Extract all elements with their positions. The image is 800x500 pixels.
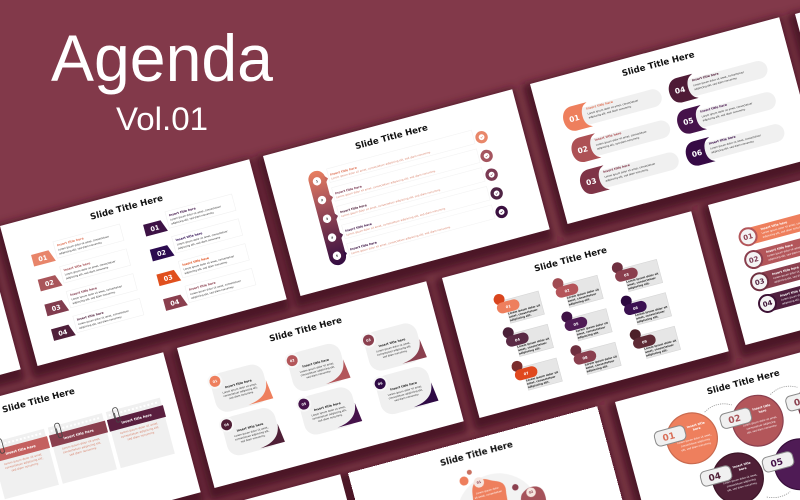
bar 03: Insert title here bbox=[772, 265, 799, 276]
decorative dots bbox=[457, 459, 519, 500]
pill 02: Insert title here bbox=[594, 131, 622, 142]
sheet 2: Insert title here bbox=[63, 428, 95, 440]
card 02: Insert title here bbox=[302, 358, 329, 369]
box 07: 07 bbox=[523, 371, 530, 376]
slide heading: Slide Title Here bbox=[1, 387, 76, 416]
item: left 03: 03 bbox=[51, 303, 62, 313]
box 08: 08 bbox=[582, 355, 588, 361]
sheet 2: sed diam nonummy. bbox=[69, 446, 97, 457]
ladder bar with numbered circles: 5 bbox=[335, 254, 338, 258]
card 05: Lorem ipsum dolor sit amet, bbox=[311, 404, 346, 417]
card 02: consectetuer adipiscing elit, bbox=[300, 364, 335, 377]
sheet 3 bbox=[104, 395, 176, 468]
item: left 03: adipiscing elit, sed diam nonummy. bbox=[72, 290, 116, 305]
card 06: Lorem ipsum dolor sit amet, bbox=[387, 384, 422, 397]
pill 05: adipiscing elit, sed diam nonummy. bbox=[702, 107, 746, 122]
box 04: 04 bbox=[515, 337, 521, 343]
bar 04 bbox=[756, 245, 800, 315]
slide heading: Slide Title Here bbox=[621, 50, 696, 79]
box 01: Lorem ipsum dolor sit bbox=[508, 303, 541, 316]
bar 01: Insert title here bbox=[760, 220, 788, 231]
sheet 2: consectetuer adipiscing elit, bbox=[63, 440, 102, 455]
box 02: amet, consectetuer bbox=[567, 291, 597, 303]
pill 02 bbox=[569, 114, 673, 164]
slide heading: Slide Title Here bbox=[89, 194, 164, 223]
card 06: consectetuer adipiscing elit, bbox=[388, 387, 423, 400]
slide heading: Slide Title Here bbox=[268, 316, 343, 345]
box 04 bbox=[501, 317, 554, 359]
circle 02: 02 bbox=[727, 414, 742, 427]
blob 02 bbox=[518, 484, 549, 500]
box 01: amet, consectetuer bbox=[508, 307, 539, 319]
list row 3: Lorem ipsum dolor sit amet, consectetuer adipiscing elit, sed diam nonummy. bbox=[341, 187, 441, 218]
circle 01: elit, sed diam nonummy. bbox=[681, 441, 712, 452]
card 03: Lorem ipsum dolor sit amet, bbox=[376, 340, 411, 354]
box 05: 05 bbox=[573, 322, 579, 327]
dotted connector 04 to 05 bbox=[767, 491, 791, 500]
box 05: adipiscing elit. bbox=[577, 330, 600, 340]
pill 03: Lorem ipsum dolor sit amet, consectetuer bbox=[604, 161, 657, 179]
bar 02: 02 bbox=[748, 255, 760, 265]
item: right 04: adipiscing elit, sed diam nonummy. bbox=[191, 285, 235, 300]
circle 05: 05 bbox=[770, 457, 784, 470]
box 02: 02 bbox=[564, 288, 571, 294]
box 09: 09 bbox=[642, 339, 648, 345]
item: right 04: 04 bbox=[169, 298, 181, 308]
box 01: adipiscing elit. bbox=[509, 313, 532, 322]
sheet 2: Lorem ipsum dolor sit amet, bbox=[62, 437, 101, 451]
item: left 04: adipiscing elit, sed diam nonummy. bbox=[79, 315, 123, 330]
circle 04: Insert title bbox=[732, 461, 751, 469]
circle 04 bbox=[696, 447, 770, 500]
card 05 bbox=[295, 383, 363, 438]
list row 1: Insert title here bbox=[330, 166, 357, 177]
card 03: consectetuer adipiscing elit, bbox=[376, 344, 412, 357]
list row 4: Lorem ipsum dolor sit amet, consectetuer adipiscing elit, sed diam nonummy. bbox=[346, 206, 446, 237]
item: right 01: 01 bbox=[150, 223, 161, 234]
item: left 02: 02 bbox=[44, 278, 55, 288]
item: left 04: Lorem ipsum dolor sit amet, consectetuer bbox=[78, 308, 130, 326]
card 01: consectetuer adipiscing elit, bbox=[223, 385, 258, 398]
pill 01: adipiscing elit, sed diam nonummy. bbox=[588, 104, 632, 120]
box 06 bbox=[620, 285, 672, 328]
ladder bar with numbered circles: 3 bbox=[326, 217, 329, 221]
box 02: adipiscing elit. bbox=[568, 297, 591, 307]
sheet 3: consectetuer adipiscing elit, bbox=[120, 425, 160, 439]
sheet 3: Lorem ipsum dolor sit amet, bbox=[119, 421, 159, 435]
panel: partial slide bottom left bbox=[91, 474, 378, 500]
pill 03: adipiscing elit, sed diam nonummy. bbox=[605, 167, 649, 183]
circle 01: here bbox=[692, 426, 701, 432]
sheet 3: Insert title here bbox=[121, 413, 153, 425]
item: right 01: Lorem ipsum dolor sit amet, consectetuer bbox=[170, 204, 222, 222]
card 05: Insert title here bbox=[313, 401, 341, 412]
circle 02: here bbox=[758, 408, 767, 414]
item: right 01: Insert title here bbox=[168, 206, 196, 217]
card 06: 06 bbox=[377, 381, 384, 386]
item: right 02: Lorem ipsum dolor sit amet, consectetuer bbox=[176, 229, 229, 246]
card 06: Insert title here bbox=[390, 381, 417, 392]
item: right 02: adipiscing elit, sed diam nonummy. bbox=[177, 235, 221, 250]
pill 04: Lorem ipsum dolor sit amet, consectetuer bbox=[693, 70, 745, 87]
ladder bar with numbered circles: 2 bbox=[321, 198, 324, 202]
bar 03: 03 bbox=[754, 277, 766, 287]
box 05: amet, consectetuer bbox=[576, 325, 606, 336]
bar 01 bbox=[736, 178, 800, 248]
circle 04: here bbox=[738, 466, 747, 472]
bar 02 bbox=[742, 201, 800, 271]
box 08: amet, consectetuer bbox=[585, 358, 615, 370]
slide heading: Slide Title Here bbox=[439, 440, 514, 469]
panel: slide with numbered circles bbox=[615, 335, 800, 500]
circle 05 bbox=[758, 432, 800, 499]
circle 04: 04 bbox=[708, 471, 722, 484]
item: right 04 bbox=[161, 268, 256, 311]
box 06: Lorem ipsum dolor sit bbox=[635, 305, 668, 317]
circle 01 bbox=[651, 406, 724, 473]
dotted connector 02 to 03 bbox=[769, 383, 797, 395]
item: left 02: Insert title here bbox=[63, 261, 91, 272]
pill 06: adipiscing elit, sed diam nonummy. bbox=[711, 139, 755, 154]
pill 05 bbox=[674, 86, 778, 136]
box 02: Lorem ipsum dolor sit bbox=[566, 287, 600, 300]
box 03: 03 bbox=[624, 272, 630, 278]
card 02: sed diam nonummy. bbox=[306, 369, 332, 379]
card 02 bbox=[283, 340, 351, 394]
box 07: adipiscing elit. bbox=[527, 380, 550, 389]
item: left 03: Insert title here bbox=[70, 286, 97, 297]
card 04: 04 bbox=[224, 422, 230, 428]
box 09 bbox=[629, 319, 681, 361]
pill 04: Insert title here bbox=[691, 72, 719, 83]
box 05 bbox=[560, 301, 612, 344]
dotted connector 01 to 02 bbox=[704, 401, 732, 412]
item: right 01: adipiscing elit, sed diam nonummy. bbox=[171, 210, 215, 226]
blob 02: 02 bbox=[528, 490, 534, 495]
bar 02: Insert title here bbox=[766, 243, 793, 254]
item: right 03: Insert title here bbox=[182, 256, 209, 267]
circle 04: Lorem ipsum dolor sit amet, bbox=[723, 472, 758, 485]
item: left 02: Lorem ipsum dolor sit amet, consectetuer bbox=[64, 259, 117, 277]
sheet 2 bbox=[46, 411, 118, 484]
bar 03 bbox=[748, 223, 800, 293]
box 08: adipiscing elit. bbox=[586, 364, 609, 373]
panel: partial slide top right bbox=[795, 0, 800, 154]
pill 04: 04 bbox=[674, 85, 686, 96]
item: left 01: Insert title here bbox=[56, 236, 84, 247]
box 04: adipiscing elit. bbox=[518, 346, 541, 356]
panel: slide with blobs bbox=[348, 406, 635, 500]
bar 04: 04 bbox=[762, 299, 773, 309]
panel: slide with six rounded cards bbox=[177, 281, 464, 488]
slide heading: Slide Title Here bbox=[706, 368, 781, 397]
pill 01: Insert title here bbox=[586, 100, 613, 111]
box 07 bbox=[510, 351, 562, 393]
blob 01: 01 bbox=[476, 480, 482, 485]
item: left 04 bbox=[49, 298, 144, 341]
sheet 1: sed diam nonummy. bbox=[11, 461, 39, 472]
blob 01: Lorem ipsum dolor bbox=[475, 485, 500, 496]
sheet 1: Insert title here bbox=[5, 444, 37, 456]
panel: partial slide far left bbox=[0, 229, 21, 436]
pill 02: Lorem ipsum dolor sit amet, consectetuer bbox=[595, 129, 648, 147]
circle 01: Insert title bbox=[686, 421, 705, 429]
circle 02: Lorem ipsum dolor sit amet, bbox=[742, 415, 778, 428]
list row 5: Lorem ipsum dolor sit amet, consectetuer adipiscing elit, sed diam nonummy. bbox=[351, 225, 451, 255]
pill 01: Lorem ipsum dolor sit amet, consectetuer bbox=[587, 98, 640, 116]
item: right 02: Insert title here bbox=[175, 231, 203, 242]
circle 04: elit, sed diam nonummy. bbox=[727, 481, 758, 492]
card 04: Insert title here bbox=[236, 422, 264, 433]
subtitle: Vol.01: Vol.01 bbox=[116, 101, 208, 137]
pill 04 bbox=[666, 55, 770, 105]
card 05: sed diam nonummy. bbox=[318, 412, 343, 423]
box 09: amet, consectetuer bbox=[645, 343, 675, 354]
card 03: Insert title here bbox=[378, 337, 406, 348]
card 01 bbox=[206, 361, 274, 415]
box 08: Lorem ipsum dolor sit bbox=[584, 354, 618, 367]
pill 03 bbox=[577, 146, 681, 196]
panel: slide with numbered bars bbox=[708, 138, 800, 345]
box 04: Lorem ipsum dolor sit bbox=[517, 336, 550, 349]
card 01: Lorem ipsum dolor sit amet, bbox=[222, 382, 257, 395]
box 01 bbox=[492, 284, 544, 326]
card 01: 01 bbox=[212, 379, 218, 384]
circle 03 bbox=[782, 371, 800, 438]
item: left 02 bbox=[36, 249, 131, 291]
sheet 1: consectetuer adipiscing elit, bbox=[5, 456, 44, 470]
list row 4: Insert title here bbox=[345, 222, 372, 233]
pill 03: 03 bbox=[585, 176, 597, 187]
pill 05: 05 bbox=[682, 116, 695, 127]
sheet 3: sed diam nonummy. bbox=[127, 430, 155, 441]
pill 06: 06 bbox=[691, 148, 703, 159]
ladder bar with numbered circles: 4 bbox=[331, 235, 334, 240]
list row 1 bbox=[327, 127, 489, 184]
card 04 bbox=[217, 404, 285, 459]
card 03: 03 bbox=[366, 338, 372, 343]
pill 02: 02 bbox=[577, 144, 589, 155]
pill 01: 01 bbox=[568, 113, 581, 124]
slide heading: Slide Title Here bbox=[533, 246, 608, 275]
item: right 03 bbox=[155, 244, 250, 286]
item: right 02 bbox=[148, 219, 243, 261]
card 04: Lorem ipsum dolor sit amet, bbox=[234, 425, 269, 438]
panel: slide with two columns of numbered tags bbox=[0, 159, 287, 366]
card 06 bbox=[371, 363, 439, 417]
sheet 1: Lorem ipsum dolor sit amet, bbox=[4, 452, 43, 466]
pill 02: adipiscing elit, sed diam nonummy. bbox=[596, 135, 640, 151]
box 01: 01 bbox=[505, 304, 512, 309]
item: left 04: Insert title here bbox=[76, 311, 104, 322]
card 05: consectetuer adipiscing elit, bbox=[312, 408, 347, 421]
pill 01 bbox=[560, 83, 664, 133]
item: right 03: Lorem ipsum dolor sit amet, consectetuer bbox=[183, 254, 236, 271]
box 09: adipiscing elit. bbox=[646, 348, 668, 358]
item: left 03 bbox=[43, 274, 138, 316]
box 07: amet, consectetuer bbox=[526, 374, 557, 386]
item: right 03: adipiscing elit, sed diam nonummy. bbox=[184, 260, 228, 275]
box 06: 06 bbox=[633, 306, 639, 311]
item: left 01: adipiscing elit, sed diam nonummy. bbox=[59, 240, 103, 256]
circle 02: Insert title bbox=[752, 403, 771, 412]
blob 01 bbox=[467, 471, 512, 500]
circle 01: consectetuer adipiscing bbox=[680, 437, 711, 448]
list row 2 bbox=[332, 145, 494, 203]
item: left 01 bbox=[29, 224, 124, 267]
item: left 01: Lorem ipsum dolor sit amet, consectetuer bbox=[58, 234, 110, 252]
circle 01: Lorem ipsum dolor sit amet, bbox=[677, 432, 712, 445]
box 03: Lorem ipsum dolor sit bbox=[626, 271, 660, 284]
list row 5: Insert title here bbox=[350, 240, 377, 251]
box 03: adipiscing elit. bbox=[628, 281, 650, 291]
sheet 1 bbox=[0, 427, 60, 499]
box 05: Lorem ipsum dolor sit bbox=[575, 320, 609, 333]
card 04: sed diam nonummy. bbox=[240, 433, 266, 444]
card 01: sed diam nonummy. bbox=[229, 390, 254, 400]
pill 06 bbox=[683, 118, 787, 168]
panel: slide with vertical ladder list bbox=[263, 89, 550, 296]
box 06: adipiscing elit. bbox=[637, 314, 659, 324]
panel: slide with paper-clip note sheets bbox=[0, 352, 201, 500]
box 08 bbox=[569, 335, 621, 377]
circle 02: consectetuer adipiscing bbox=[746, 419, 776, 431]
box 09: Lorem ipsum dolor sit bbox=[644, 338, 677, 351]
list row 2: Insert title here bbox=[335, 184, 362, 195]
box 03: amet, consectetuer bbox=[627, 276, 657, 287]
item: right 03: 03 bbox=[163, 273, 174, 283]
box 07: Lorem ipsum dolor sit bbox=[525, 370, 559, 382]
item: right 01 bbox=[141, 194, 237, 237]
background circle bbox=[448, 464, 551, 500]
card 04: consectetuer adipiscing elit, bbox=[235, 428, 270, 442]
item: left 04: 04 bbox=[57, 328, 69, 338]
title: Agenda: Agenda bbox=[51, 21, 273, 95]
item: right 04: Lorem ipsum dolor sit amet, consectetuer bbox=[190, 278, 242, 296]
pill 05: Insert title here bbox=[700, 103, 727, 114]
pill 03: Insert title here bbox=[603, 163, 630, 174]
list row 3 bbox=[337, 164, 499, 222]
card 03: sed diam nonummy. bbox=[382, 349, 408, 359]
card 02: 02 bbox=[289, 358, 296, 363]
card 02: Lorem ipsum dolor sit amet, bbox=[299, 361, 335, 374]
item: left 01: 01 bbox=[37, 253, 49, 264]
box 02 bbox=[551, 268, 603, 310]
circle 02: elit, sed diam nonummy. bbox=[747, 423, 778, 435]
blob 01: sit amet, consectetuer bbox=[474, 489, 503, 500]
panel: slide with six pill items bbox=[530, 17, 800, 224]
card 03 bbox=[359, 319, 427, 374]
item: left 02: adipiscing elit, sed diam nonummy. bbox=[65, 265, 109, 280]
panel: slide with nine tagged boxes bbox=[442, 211, 729, 418]
list row 5 bbox=[347, 201, 509, 259]
slide heading: Slide Title Here bbox=[354, 123, 429, 152]
circle 01: 01 bbox=[662, 431, 676, 444]
item: right 04: Insert title here bbox=[188, 281, 216, 292]
card 05: 05 bbox=[301, 402, 307, 407]
box 03 bbox=[611, 252, 663, 294]
box 04: amet, consectetuer bbox=[518, 341, 548, 352]
ladder bar with numbered circles bbox=[306, 168, 350, 267]
list row 2: Lorem ipsum dolor sit amet, consectetuer adipiscing elit, sed diam nonummy. bbox=[336, 169, 436, 199]
pill 06: Insert title here bbox=[708, 135, 736, 146]
pill 06: Lorem ipsum dolor sit amet, consectetuer bbox=[710, 133, 762, 151]
card 01: Insert title here bbox=[225, 378, 252, 389]
list row 3: Insert title here bbox=[340, 203, 367, 214]
item: right 02: 02 bbox=[156, 248, 167, 258]
bar 01: 01 bbox=[742, 232, 754, 242]
pill 04: adipiscing elit, sed diam nonummy. bbox=[694, 76, 738, 91]
ladder bar with numbered circles: 1 bbox=[315, 179, 319, 184]
card 06: sed diam nonummy. bbox=[394, 392, 420, 402]
list row 1: Lorem ipsum dolor sit amet, consectetuer adipiscing elit, sed diam nonummy. bbox=[331, 150, 431, 181]
pill 05: Lorem ipsum dolor sit amet, consectetuer bbox=[701, 101, 754, 119]
item: left 03: Lorem ipsum dolor sit amet, consectetuer bbox=[71, 284, 123, 301]
list row 4 bbox=[342, 183, 504, 240]
box 06: amet, consectetuer bbox=[636, 309, 666, 321]
circle 04: consectetuer adipiscing bbox=[726, 477, 756, 488]
circle 02 bbox=[716, 389, 790, 455]
